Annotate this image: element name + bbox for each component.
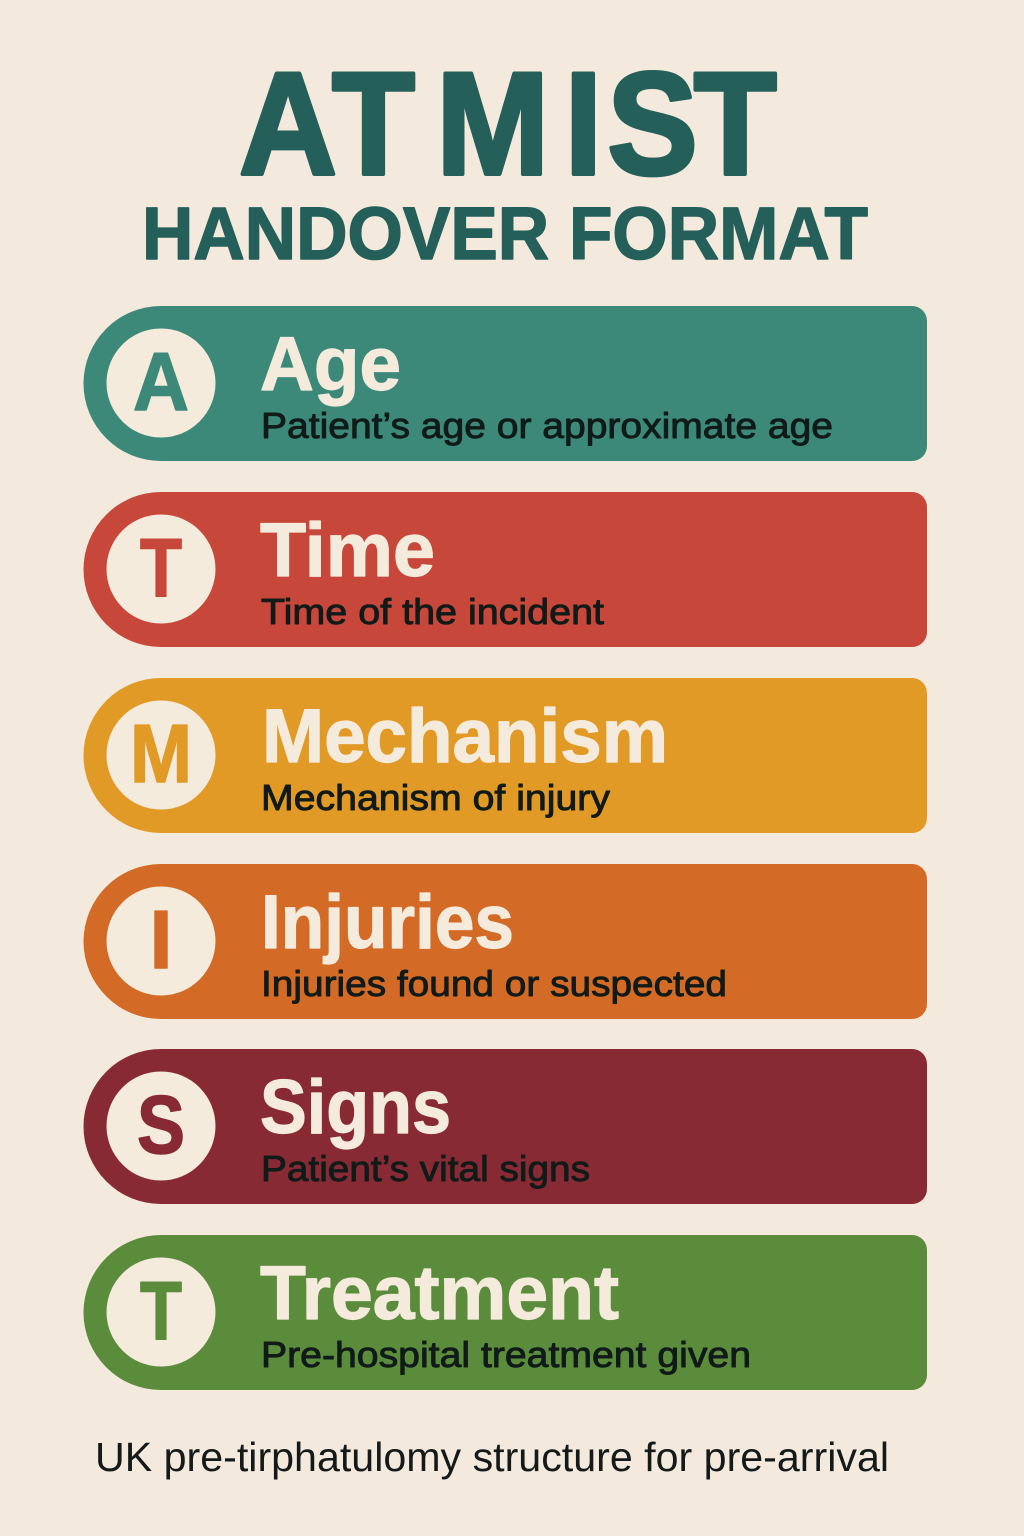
icon: letter S badge: S — [137, 1078, 185, 1171]
heading: Treatment: Treatment — [260, 1251, 619, 1336]
panel: T Time — [83, 492, 927, 647]
heading: Injuries: Injuries — [261, 880, 514, 965]
panel: A Age — [83, 306, 927, 461]
description: Signs: Patient’s vital signs — [261, 1148, 590, 1189]
panel: S Signs — [83, 1049, 927, 1204]
icon: letter S badge — [106, 1072, 216, 1180]
icon: letter I badge: I — [150, 893, 172, 986]
icon: letter T badge — [106, 1258, 216, 1366]
panel: M Mechanism — [83, 678, 927, 833]
title: ATMIST — [239, 41, 777, 205]
description: Injuries: Injuries found or suspected — [261, 963, 727, 1004]
heading: Age: Age — [260, 322, 401, 407]
icon: letter M badge: M — [130, 707, 192, 800]
icon: letter A badge: A — [133, 335, 189, 428]
panel: I Injuries — [83, 864, 927, 1019]
heading: Signs: Signs — [260, 1065, 451, 1150]
description: Time: Time of the incident — [261, 591, 604, 632]
subtitle: HANDOVER FORMAT — [142, 192, 868, 275]
description: Mechanism: Mechanism of injury — [261, 777, 610, 818]
icon: letter T badge: T — [140, 1264, 182, 1357]
footer note: UK pre-tirphatulomy structure for pre-arrival — [95, 1434, 889, 1480]
description: Treatment: Pre-hospital treatment given — [261, 1334, 751, 1375]
icon: letter A badge — [106, 328, 216, 438]
description: Age: Patient’s age or approximate age — [261, 405, 833, 446]
icon: letter I badge — [106, 886, 216, 996]
icon: letter T badge: T — [140, 521, 182, 614]
heading: Time: Time — [260, 508, 435, 593]
heading: Mechanism: Mechanism — [262, 694, 668, 779]
icon: letter T badge — [106, 514, 216, 624]
panel: T Treatment — [83, 1235, 927, 1390]
icon: letter M badge — [106, 700, 216, 810]
